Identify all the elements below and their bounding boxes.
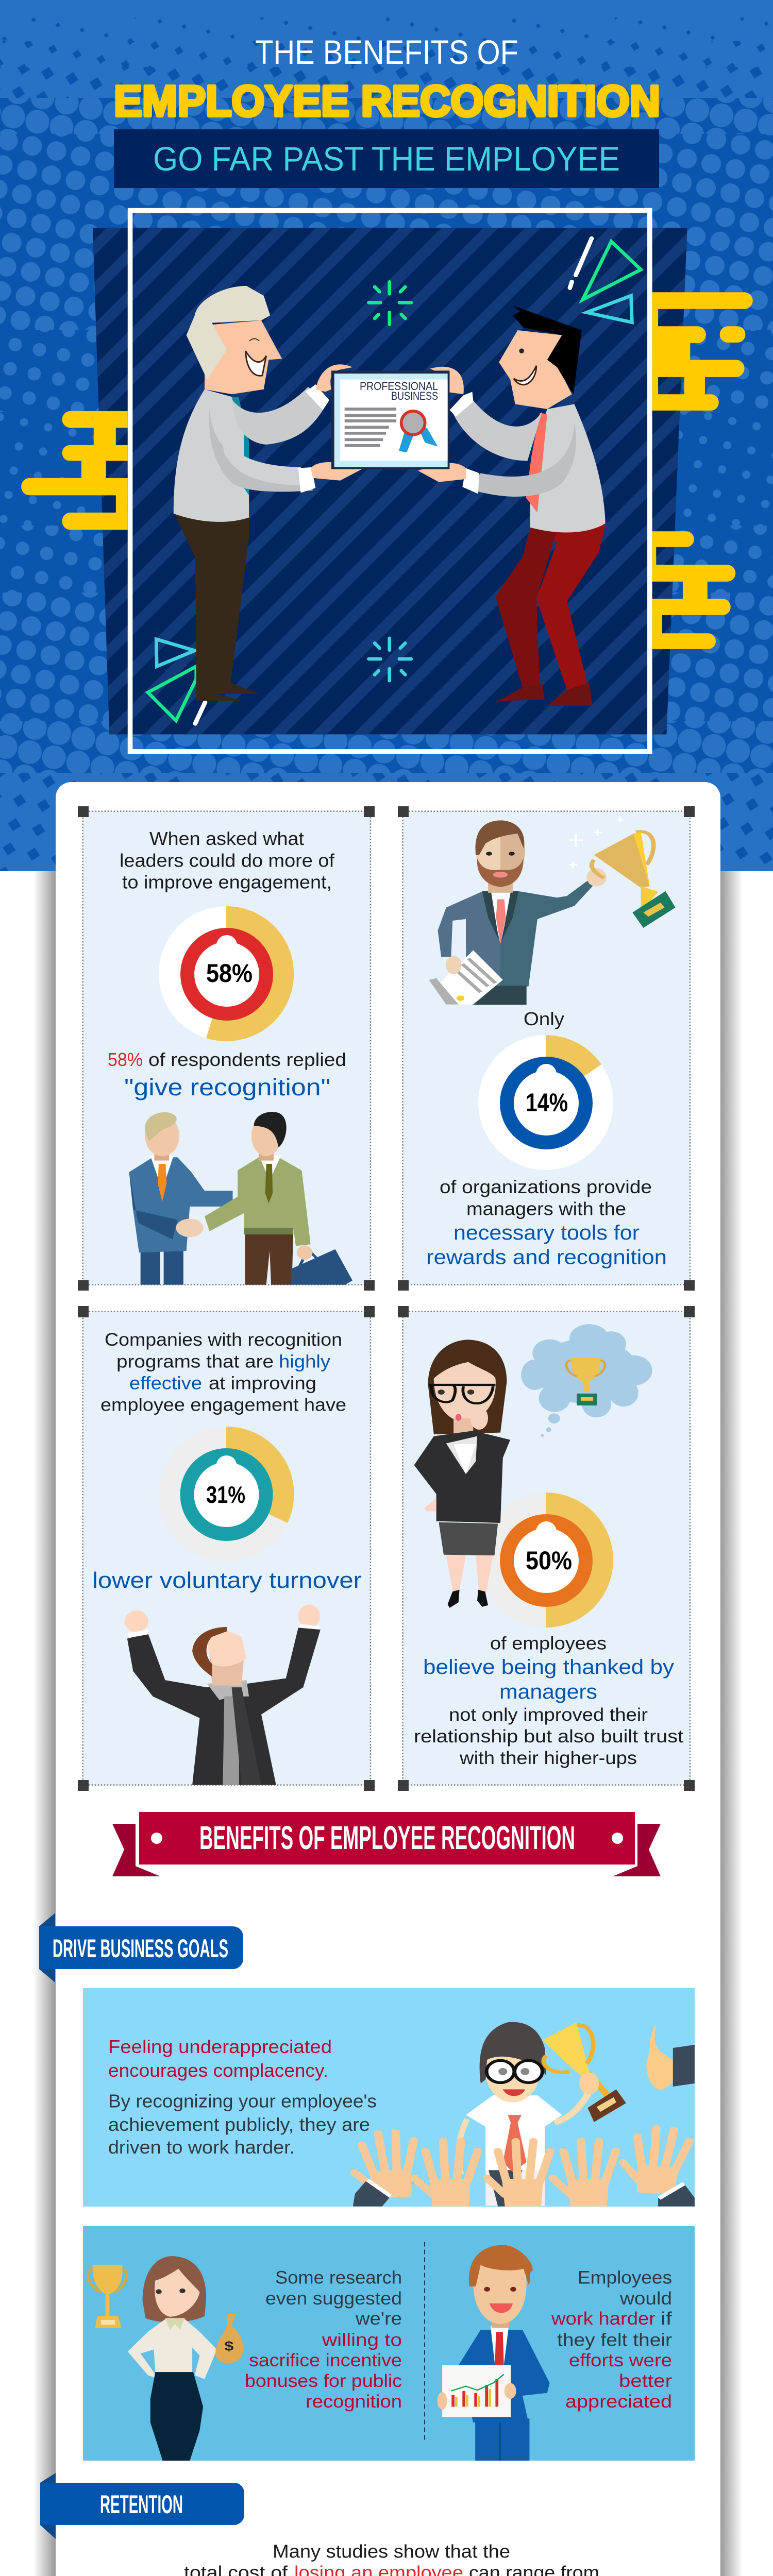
donut chart: 14%: 14%: [526, 1088, 568, 1117]
text: employees would: [551, 2268, 672, 2412]
text: some research: Some research: [275, 2268, 402, 2288]
text: employees would: appreciated: [565, 2392, 672, 2412]
donut chart: 58%: [159, 906, 294, 1041]
text: some research: we're: [355, 2309, 402, 2329]
text: employees would: they felt their: [557, 2330, 672, 2350]
section tab: drive business goals: [39, 1913, 243, 1982]
panel: 31% lower turnover: [78, 1306, 375, 1791]
text: feeling underappreciated: encourages complacency.: [108, 2060, 328, 2081]
text: of employees believe: relationship but also built trust: [414, 1726, 683, 1747]
text: companies: effective: [129, 1373, 202, 1393]
panel: willing to sacrifice and work harder: [83, 2226, 695, 2461]
illustration: handshake: [129, 1112, 352, 1285]
section tab: retention: [40, 2473, 244, 2539]
text: companies: at improving: [209, 1373, 316, 1393]
text: feeling underappreciated: By recognizing your employee's: [108, 2091, 377, 2111]
text: when asked: to improve engagement,: [122, 872, 332, 892]
title: THE BENEFITS OF: [255, 33, 518, 71]
right businessman: [418, 306, 606, 706]
hero illustration: two businessmen with certificate: [21, 210, 753, 752]
text: companies: highly: [279, 1351, 331, 1371]
icon: green sparkle: [369, 282, 411, 324]
illustration: man with trophy and clapping hands: [349, 2022, 695, 2207]
text: lower voluntary turnover: lower voluntary turnover: [92, 1568, 362, 1593]
illustration: thinking woman and trophy cloud: [414, 1324, 652, 1608]
icon: triangles: [148, 239, 641, 723]
text: 58% of respondents: of respondents replied: [148, 1049, 346, 1070]
text: employees would: efforts were: [569, 2350, 672, 2370]
illustration: man raising arms: [125, 1605, 321, 1785]
certificate label: PROFESSIONAL: [360, 380, 438, 393]
certificate: [331, 370, 449, 469]
text: when asked: leaders could do more of: [120, 850, 335, 871]
panel: 50% being thanked: [398, 1306, 695, 1791]
text: many studies: Many studies show that the: [273, 2541, 510, 2562]
text: employees would: better: [619, 2371, 672, 2391]
text: organizations: rewards and recognition: [426, 1246, 667, 1268]
text: employees would: Employees: [578, 2268, 672, 2288]
donut chart: 14%: [478, 1035, 613, 1170]
donut chart: 31%: [159, 1427, 294, 1562]
donut chart: 58%: 58%: [206, 959, 253, 988]
text: some research: even suggested: [265, 2289, 402, 2309]
text: some research: [245, 2268, 402, 2412]
text: 58% of respondents: "give recognition": [124, 1074, 330, 1100]
certificate label: [360, 380, 438, 402]
text: organizations: managers with the: [466, 1198, 626, 1219]
illustration: woman with trophy and money bag: [88, 2245, 550, 2461]
text: organizations: of organizations provide: [440, 1176, 652, 1197]
text: of employees believe: of employees: [490, 1633, 607, 1654]
ribbon heading: benefits of employee recognition: [112, 1812, 661, 1876]
section tab: retention: RETENTION: [100, 2490, 183, 2519]
text: companies: programs that are: [116, 1351, 274, 1371]
text: only: Only: [524, 1008, 564, 1029]
text: organizations: [426, 1176, 667, 1268]
left businessman: [174, 286, 364, 701]
text: 58% of respondents: 58%: [108, 1049, 143, 1070]
text: feeling underappreciated: [108, 2036, 377, 2158]
text: of employees believe: managers: [499, 1681, 597, 1703]
text: companies: Companies with recognition: [105, 1330, 342, 1350]
text: of employees believe: not only improved their: [449, 1705, 648, 1725]
text: feeling underappreciated: achievement publicly, they are: [108, 2114, 370, 2135]
title: [114, 33, 660, 125]
text: feeling underappreciated: Feeling underappreciated: [108, 2036, 332, 2057]
text: companies: [100, 1330, 346, 1415]
panel: 58% give recognition: [78, 806, 375, 1291]
text: employees would: if: [661, 2309, 672, 2329]
panel: 14% tools: [398, 806, 695, 1291]
donut chart: 50%: 50%: [526, 1546, 572, 1575]
title: EMPLOYEE RECOGNITION: [114, 77, 660, 125]
illustration: man with trophy: [429, 817, 676, 1005]
text: organizations: necessary tools for: [453, 1222, 640, 1244]
donut chart: 31%: 31%: [206, 1481, 245, 1508]
text: when asked: When asked what: [149, 828, 304, 849]
text: some research: recognition: [306, 2392, 402, 2412]
text: of employees believe: [414, 1633, 683, 1768]
text: companies: employee engagement have: [100, 1395, 346, 1415]
section tab: drive business goals: DRIVE BUSINESS GOALS: [53, 1934, 228, 1963]
text: some research: willing to: [322, 2330, 402, 2350]
panel: feeling underappreciated: [83, 1988, 695, 2207]
text: many studies: [122, 2541, 662, 2576]
donut chart: 50%: [478, 1493, 613, 1628]
text: of employees believe: with their higher-ups: [459, 1748, 637, 1768]
text: employees would: work harder: [551, 2309, 656, 2329]
text: employees would: would: [619, 2289, 672, 2309]
text: 58% of respondents: [108, 1049, 346, 1100]
text: of employees believe: believe being thanked by: [423, 1656, 674, 1679]
text: feeling underappreciated: driven to work harder.: [108, 2137, 295, 2158]
text: when asked: [120, 828, 335, 892]
text: some research: bonuses for public: [245, 2371, 402, 2391]
illustration: woman with trophy and money bag: $: [224, 2339, 233, 2354]
card shadow and white card: [33, 782, 743, 2576]
icon: yellow speed bars: [21, 292, 753, 649]
subtitle banner: GO FAR PAST THE EMPLOYEE: [153, 140, 620, 178]
certificate label: BUSINESS: [391, 389, 438, 402]
icon: teal sparkle: [369, 638, 411, 681]
text: some research: sacrifice incentive: [249, 2350, 402, 2370]
subtitle banner: [114, 129, 659, 188]
